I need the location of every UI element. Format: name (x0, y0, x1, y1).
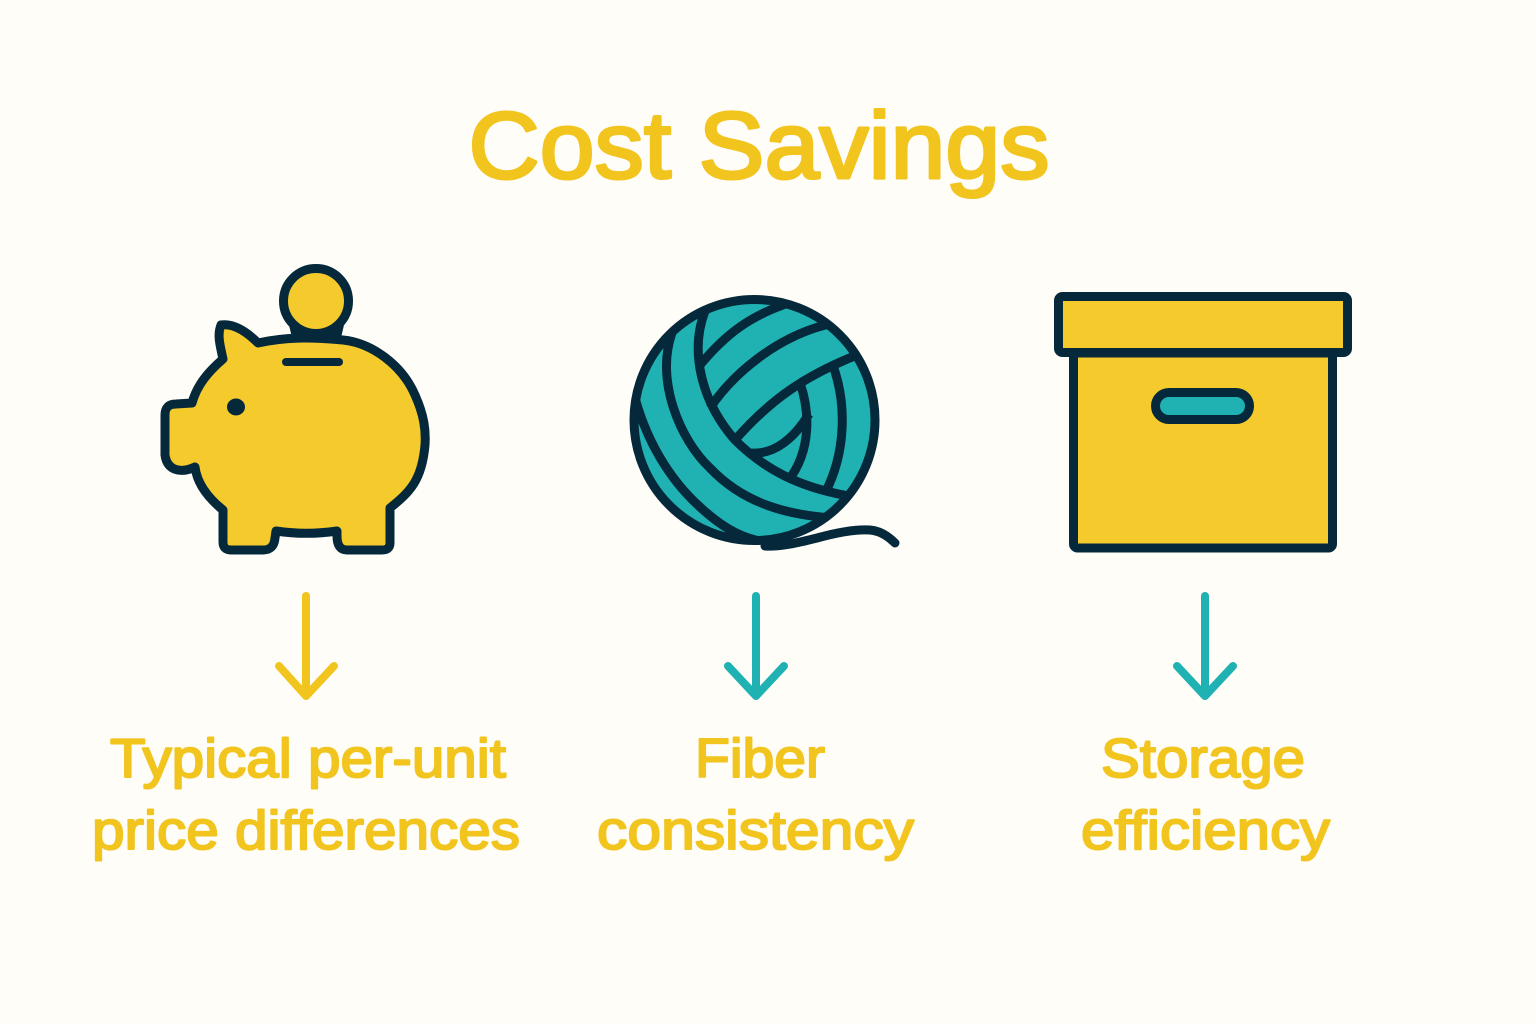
box lid (1058, 296, 1348, 352)
label: storage efficiency (1081, 727, 1331, 861)
label: storage efficiency: efficiency (1081, 799, 1331, 861)
slot (286, 358, 339, 366)
pig body (165, 325, 425, 550)
arrow: piggy bank (279, 596, 334, 696)
yarn sphere (634, 300, 875, 540)
coin (284, 268, 348, 342)
icon: ball of yarn (633, 300, 895, 546)
box handle (1156, 392, 1250, 420)
label: per-unit price: Typical per-unit (110, 727, 506, 789)
label: fiber consistency: consistency (597, 799, 915, 861)
label: per-unit price (92, 727, 520, 861)
label: fiber consistency (597, 727, 915, 861)
eye (229, 400, 243, 414)
box body (1074, 353, 1332, 548)
title: Cost Savings (468, 93, 1050, 199)
icon: piggy bank (165, 268, 425, 550)
label: fiber consistency: Fiber (695, 727, 825, 789)
icon: storage box (1058, 296, 1348, 548)
yarn tail (765, 530, 895, 546)
yarn strands (633, 302, 862, 543)
arrow: yarn (728, 596, 784, 696)
arrow: box (1177, 596, 1233, 696)
label: storage efficiency: Storage (1101, 727, 1305, 789)
label: per-unit price: price differences (92, 799, 520, 861)
